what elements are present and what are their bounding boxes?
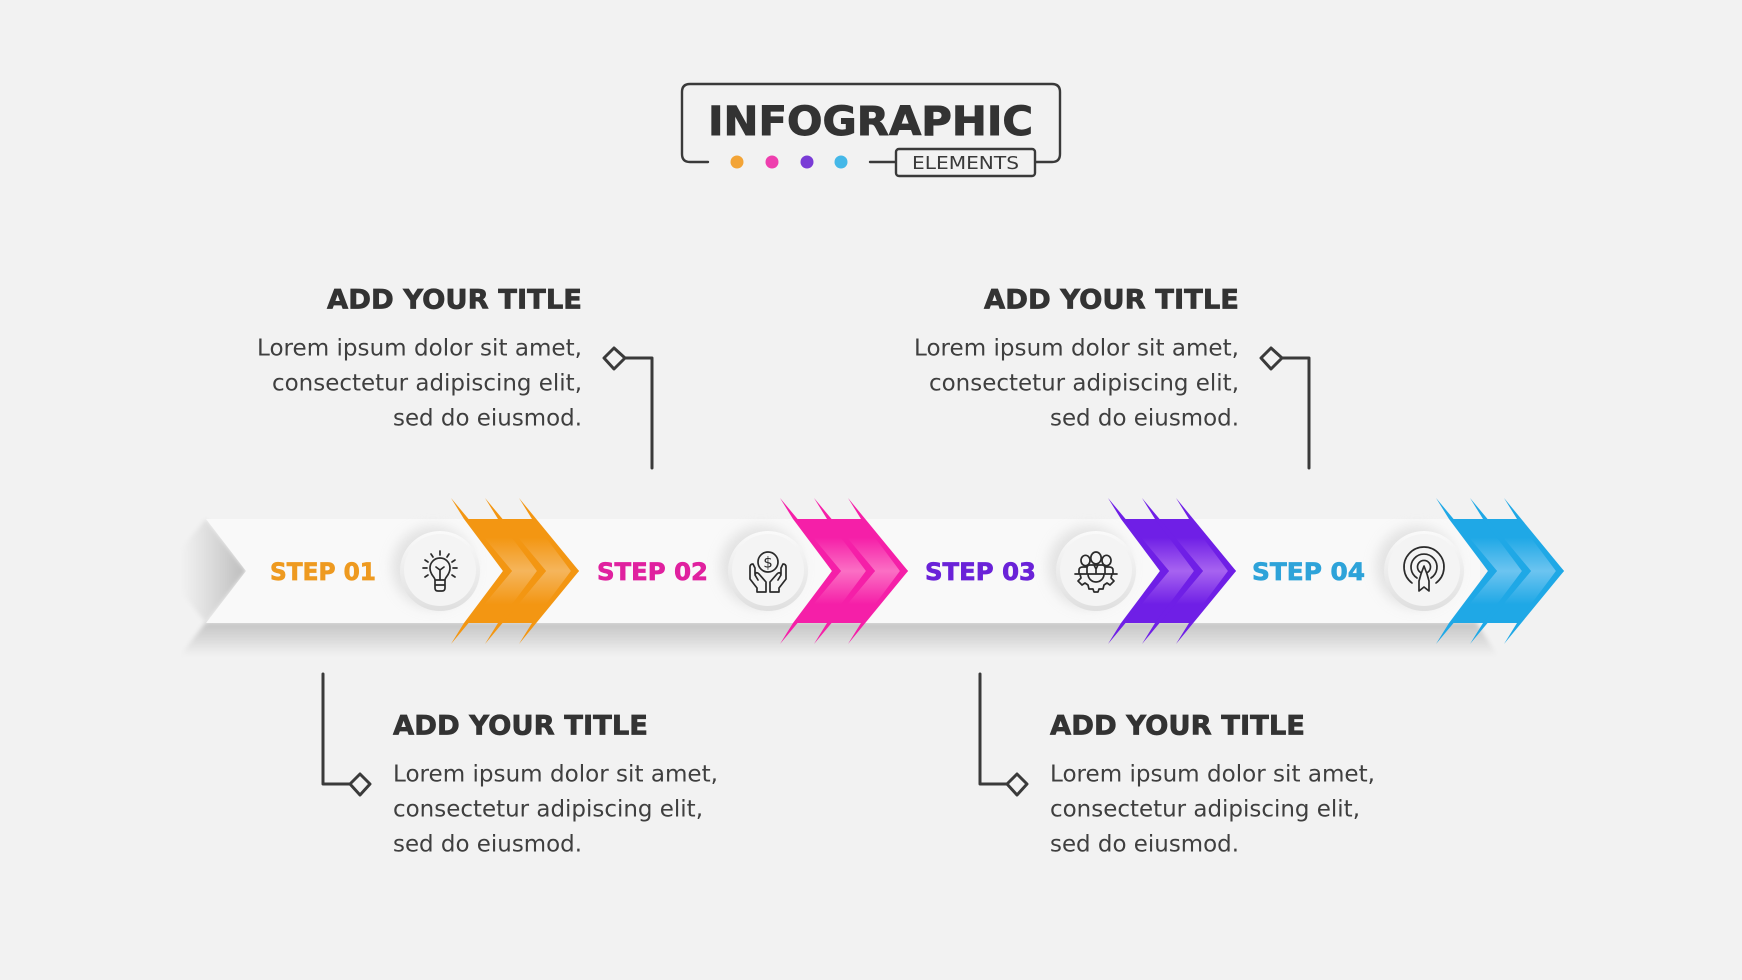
callout: step 3 top	[914, 284, 1309, 468]
connector	[980, 674, 1027, 795]
body text: sed do eiusmod.	[1050, 831, 1239, 857]
chevrons: step 3 purple	[1108, 498, 1236, 644]
body text: consectetur adipiscing elit,	[929, 370, 1239, 396]
title: ADD YOUR TITLE	[393, 710, 648, 742]
step 03 label: STEP 03	[925, 558, 1036, 586]
body text: Lorem ipsum dolor sit amet,	[393, 761, 718, 787]
icon: light bulb	[392, 526, 480, 611]
body text	[914, 335, 1239, 431]
icon: hands holding coin: $	[763, 554, 773, 572]
step labels	[270, 558, 1365, 586]
chevrons: step 2 pink	[780, 498, 908, 644]
step 01 label: STEP 01	[270, 558, 376, 586]
body text: Lorem ipsum dolor sit amet,	[1050, 761, 1375, 787]
title: ADD YOUR TITLE	[327, 284, 582, 316]
title: ADD YOUR TITLE	[984, 284, 1239, 316]
elements tag: ELEMENTS	[912, 154, 1019, 174]
callout: step 2 bottom	[323, 674, 718, 857]
title: ADD YOUR TITLE	[1050, 710, 1305, 742]
body text	[1050, 761, 1375, 857]
step 04 label: STEP 04	[1252, 558, 1365, 586]
step 02 label: STEP 02	[597, 558, 708, 586]
body text: Lorem ipsum dolor sit amet,	[914, 335, 1239, 361]
body text: consectetur adipiscing elit,	[393, 796, 703, 822]
icon: hands holding coin	[720, 526, 808, 611]
badge frame	[682, 84, 1060, 162]
title badge	[682, 84, 1060, 176]
icon: target signal	[1376, 526, 1464, 611]
band shadow	[180, 622, 1498, 656]
body text: consectetur adipiscing elit,	[272, 370, 582, 396]
heading: infographic: INFOGRAPHIC	[708, 99, 1033, 145]
connector	[604, 348, 652, 468]
tail notch shadow	[181, 519, 246, 623]
body text	[393, 761, 718, 857]
callout: step 4 bottom	[980, 674, 1375, 857]
callout: step 1 top	[257, 284, 652, 468]
body text	[257, 335, 582, 431]
colour dots	[730, 156, 848, 168]
body text: consectetur adipiscing elit,	[1050, 796, 1360, 822]
connector	[1261, 348, 1309, 468]
chevrons: step 1 orange	[451, 498, 579, 644]
body text: Lorem ipsum dolor sit amet,	[257, 335, 582, 361]
body text: sed do eiusmod.	[393, 831, 582, 857]
chevrons: step 4 blue	[1436, 498, 1564, 644]
elements tag	[896, 149, 1035, 176]
arrow band	[180, 519, 1498, 656]
connector	[323, 674, 370, 795]
body text: sed do eiusmod.	[393, 405, 582, 431]
body text: sed do eiusmod.	[1050, 405, 1239, 431]
icon: team and gear	[1048, 526, 1136, 611]
band body	[206, 519, 1480, 623]
